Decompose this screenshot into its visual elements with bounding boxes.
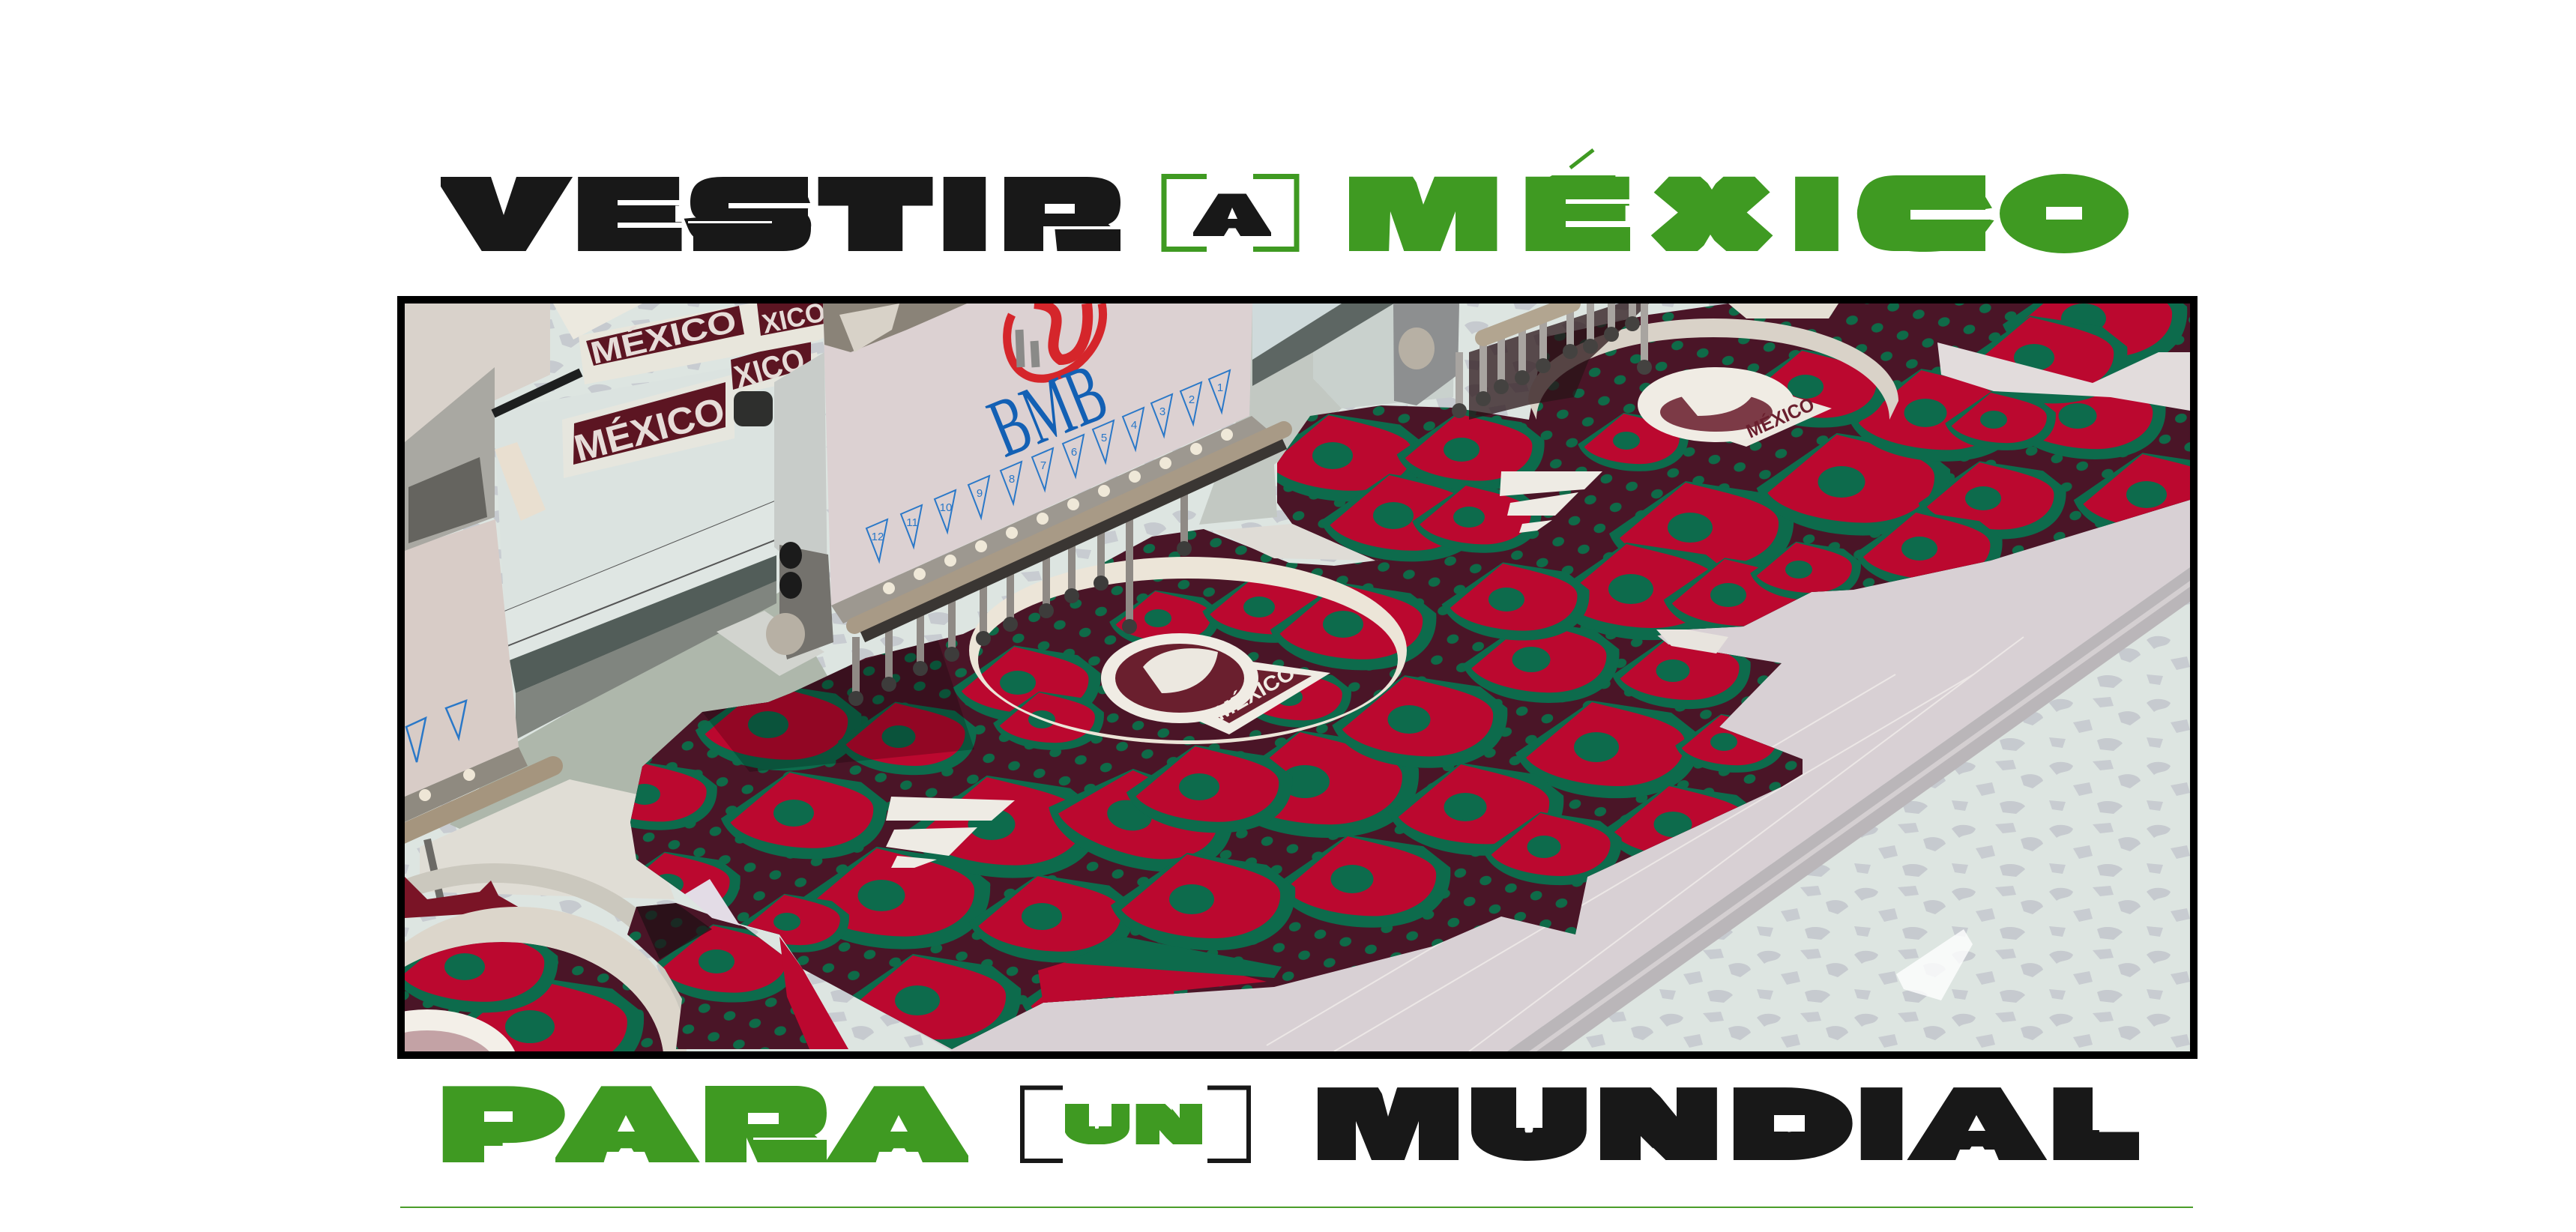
jersey right bbox=[1277, 304, 2190, 647]
bracket left black bbox=[1022, 1088, 1063, 1161]
counters of MUNDIAL bbox=[1356, 1083, 2145, 1164]
numbered thread triangles: 1 bbox=[1217, 381, 1223, 394]
numbered thread triangles: 11 bbox=[906, 516, 918, 529]
word: VESTIR: R bbox=[1015, 170, 1109, 258]
table bbox=[802, 450, 2190, 1051]
lower patch: MÉXICO bbox=[570, 389, 729, 470]
machine mount at top of panel bbox=[823, 304, 967, 352]
far machine bolt strip bbox=[405, 747, 528, 822]
word: MUNDIAL: N bbox=[1608, 1081, 1709, 1167]
right emblem: MÉXICO bbox=[1743, 393, 1818, 442]
center emblem: MÉXICO bbox=[1211, 660, 1299, 725]
word: VESTIR: T bbox=[834, 170, 917, 258]
floor under top machine bbox=[1199, 304, 1342, 525]
table grooves bbox=[1267, 637, 2024, 1051]
counters of VESTIR bbox=[489, 172, 1126, 255]
numbered thread triangles: 7 bbox=[1040, 459, 1046, 472]
white scrap bbox=[685, 879, 740, 925]
word: MUNDIAL: A bbox=[1928, 1081, 2026, 1167]
word: MUNDIAL: L bbox=[2060, 1081, 2131, 1167]
red logo bbox=[1007, 304, 1103, 378]
floor highlight bbox=[1896, 929, 1973, 1000]
numbered thread triangles: 10 bbox=[940, 501, 952, 514]
solid letter bodies of PARA bbox=[705, 1086, 827, 1162]
solid letter bodies of MÉXICO bbox=[1858, 174, 2129, 253]
emblem lower left bbox=[336, 1009, 519, 1126]
BMB brand: BMB bbox=[977, 345, 1119, 475]
shadow near needles bbox=[702, 637, 974, 772]
word: MÉXICO: O bbox=[2012, 170, 2117, 258]
center emblem bbox=[1101, 633, 1330, 734]
dark mechanism under bar bbox=[862, 442, 1284, 635]
photo: embroidery machines stitching the Mexico jersey bbox=[405, 304, 2190, 1051]
three-bar logo center jersey bbox=[886, 797, 1015, 868]
rod bbox=[854, 429, 1284, 626]
hoop right bbox=[1528, 318, 1898, 420]
right machine rod bbox=[1483, 304, 1572, 338]
upper patch: XICO bbox=[759, 296, 828, 339]
solid letter bodies of VESTIR bbox=[690, 177, 1120, 251]
jersey main bbox=[630, 529, 1803, 1049]
hoop lower left ring bbox=[340, 907, 687, 1192]
far machine rod bbox=[397, 766, 553, 836]
bolt strip bbox=[831, 416, 1267, 623]
word: PARA: A bbox=[576, 1080, 677, 1169]
upper patch bbox=[553, 296, 842, 384]
white gap left of main jersey bbox=[1214, 524, 1375, 561]
word: VESTIR: V bbox=[459, 170, 549, 258]
gap between jerseys upper right bbox=[1937, 342, 2190, 411]
counters of UN bbox=[1089, 1098, 1180, 1148]
word: MUNDIAL: D bbox=[1742, 1080, 1841, 1167]
word: MÉXICO: C bbox=[1870, 170, 1973, 258]
bracket right green bbox=[1253, 177, 1297, 249]
collar ribbing bbox=[1656, 629, 1728, 653]
word: MUNDIAL: I bbox=[1867, 1081, 1896, 1168]
numbered thread triangles: 9 bbox=[977, 487, 983, 500]
word: PARA bbox=[452, 1079, 950, 1169]
red hem strip bbox=[1038, 944, 1267, 1004]
numbered triangles on left panel bbox=[406, 701, 466, 762]
photo frame bbox=[401, 300, 2194, 1055]
word: PARA: A bbox=[848, 1080, 950, 1169]
back hoop lower left bbox=[315, 873, 675, 1120]
bracket right black bbox=[1207, 1088, 1249, 1161]
right machine base block bbox=[1313, 304, 1454, 408]
word: MÉXICO: I bbox=[1802, 169, 1832, 258]
numbered thread triangles: 5 bbox=[1101, 432, 1107, 444]
far machine metal bbox=[405, 367, 495, 551]
spool bbox=[734, 391, 773, 426]
jersey peacock-eye motifs bbox=[588, 272, 2239, 1051]
counters of MÉXICO bbox=[1389, 171, 2082, 255]
three-bar logo right jersey bbox=[1500, 471, 1602, 533]
floor bbox=[405, 304, 2190, 1051]
word: VESTIR: I bbox=[950, 171, 980, 258]
word: VESTIR: S bbox=[702, 170, 798, 258]
word: MÉXICO: X bbox=[1665, 170, 1759, 258]
needles right machine bbox=[1459, 304, 1644, 411]
numbered thread triangles: 6 bbox=[1071, 446, 1077, 459]
dark slot bbox=[493, 372, 581, 414]
numbered thread triangles: 12 bbox=[872, 531, 884, 543]
word: PARA: P bbox=[452, 1079, 551, 1169]
word: UN: N bbox=[1141, 1100, 1198, 1148]
word: MUNDIAL bbox=[1326, 1080, 2131, 1168]
numbered thread triangles: 4 bbox=[1131, 419, 1137, 432]
far machine top cover bbox=[405, 304, 550, 442]
word: MÉXICO bbox=[1349, 175, 2127, 252]
hoop center bbox=[969, 557, 1407, 744]
upper patch: MÉXICO bbox=[587, 303, 740, 371]
word: MÉXICO: M bbox=[1357, 170, 1488, 258]
bracket left green bbox=[1164, 177, 1207, 249]
center machine side panel bbox=[774, 352, 827, 592]
numbered thread triangles: 3 bbox=[1159, 405, 1165, 418]
table rail bbox=[1507, 567, 2190, 1051]
word: MÉXICO: É bbox=[1533, 170, 1620, 258]
word: MUNDIAL: U bbox=[1480, 1081, 1578, 1167]
far machine panel left bbox=[405, 519, 519, 797]
lower patch: XICO bbox=[731, 341, 809, 395]
word: VESTIR: E bbox=[586, 170, 670, 258]
title line 1: VESTIR [A] MÉXICO bbox=[459, 150, 2129, 258]
lower fold of jersey bbox=[627, 903, 848, 1049]
left floor texture bbox=[450, 592, 827, 829]
word: VESTIR bbox=[441, 177, 1111, 251]
hoop lower left interior bbox=[340, 942, 664, 1186]
green rule bbox=[400, 1207, 2193, 1208]
bracket bbox=[779, 545, 833, 659]
word: PARA: R bbox=[717, 1080, 815, 1169]
numbered thread triangles bbox=[866, 370, 1230, 561]
word: A: A bbox=[1203, 190, 1261, 241]
far back shelf bbox=[1252, 304, 1394, 386]
numbered thread triangles: 8 bbox=[1009, 473, 1015, 486]
white knob bbox=[495, 442, 546, 521]
base block center bbox=[717, 611, 824, 676]
word: UN bbox=[1070, 1100, 1198, 1148]
word: MUNDIAL: M bbox=[1326, 1081, 1450, 1167]
accent of É bbox=[1570, 150, 1593, 168]
left floor upper bbox=[493, 360, 776, 611]
word: UN: U bbox=[1070, 1101, 1124, 1148]
small shirt piece lower left bbox=[405, 877, 525, 918]
title line 2: PARA [UN] MUNDIAL bbox=[452, 1079, 2145, 1169]
right machine bracket bbox=[1393, 304, 1459, 405]
right emblem bbox=[1638, 367, 1832, 447]
numbered thread triangles: 2 bbox=[1189, 393, 1195, 406]
center machine panel bbox=[823, 304, 1252, 606]
back rail bbox=[504, 500, 776, 660]
counters of PARA bbox=[484, 1111, 924, 1166]
shadow behind right machine needles bbox=[1469, 304, 1649, 420]
needles center machine bbox=[856, 487, 1184, 698]
lower patch bbox=[562, 337, 821, 478]
